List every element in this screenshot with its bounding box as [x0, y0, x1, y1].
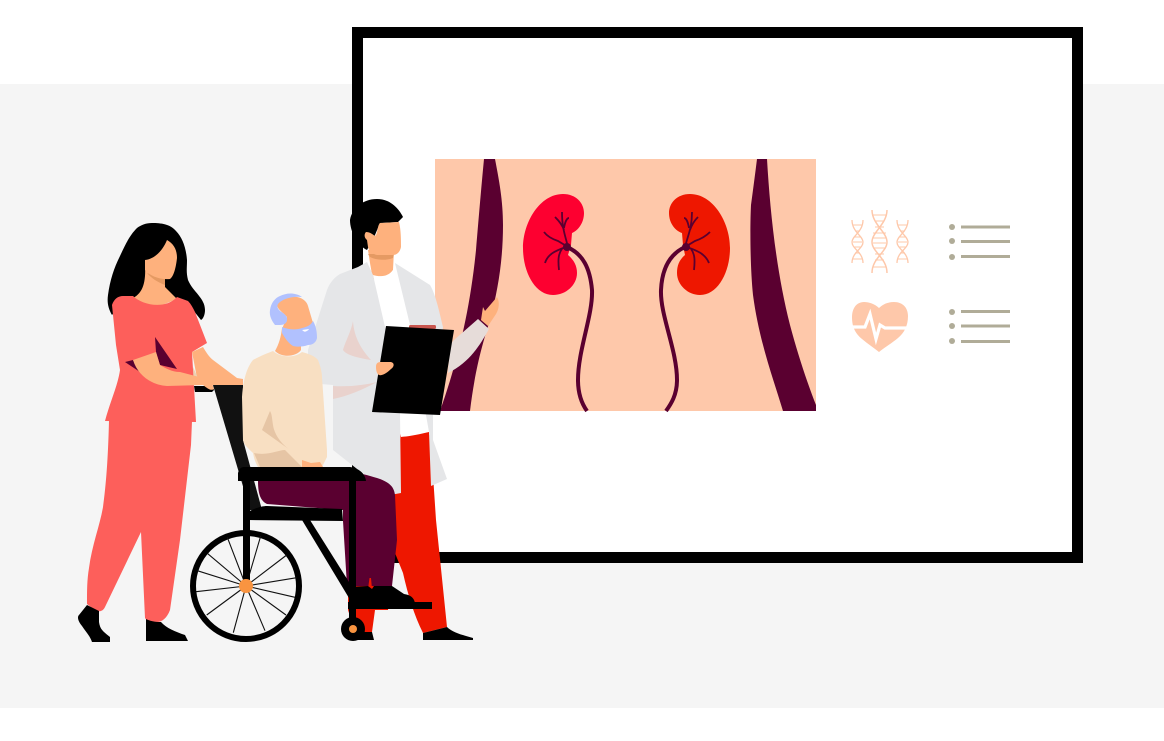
clipboard tab — [409, 325, 436, 329]
doctor hair — [350, 199, 403, 250]
footrest — [348, 602, 432, 609]
patient face — [277, 297, 313, 332]
sweater shadow — [254, 411, 302, 467]
wheelchair back — [213, 385, 262, 510]
patient mouth — [302, 329, 309, 332]
doctor hand on clipboard — [376, 362, 394, 375]
clipboard — [372, 326, 454, 415]
body contour left — [440, 159, 503, 411]
left kidney — [523, 194, 592, 411]
coat shadow upper — [343, 321, 371, 360]
tan wedge under arm — [193, 367, 204, 380]
patient sweater — [242, 351, 327, 467]
patient in wheelchair — [242, 294, 415, 603]
doctor red trousers — [348, 430, 447, 633]
nurse tunic — [105, 296, 207, 422]
doctor feet — [353, 627, 473, 640]
nurse hair — [108, 223, 205, 320]
nurse trousers — [87, 421, 192, 622]
right kidney — [661, 194, 730, 411]
seat — [248, 506, 343, 521]
rear wheel — [193, 533, 299, 639]
panel: kidney anatomy — [435, 159, 816, 411]
nurse left foot — [78, 605, 110, 642]
nurse face — [145, 240, 177, 279]
coat shadow lower — [333, 382, 377, 399]
spokes — [196, 536, 297, 633]
doctor lab coat — [308, 262, 447, 495]
doctor neck — [368, 250, 394, 280]
patient hand — [302, 460, 323, 467]
list lines top — [949, 224, 1010, 260]
list lines bottom — [949, 309, 1010, 344]
doctor face — [365, 222, 401, 255]
hub — [239, 579, 253, 593]
doctor right sleeve — [448, 319, 489, 373]
doctor red waist — [401, 432, 431, 455]
doctor white t-shirt — [373, 270, 430, 437]
front caster — [341, 617, 365, 641]
tunic fold shadows — [125, 337, 177, 372]
doctor — [308, 199, 499, 640]
right post — [349, 478, 356, 623]
icon: DNA helixes — [852, 210, 908, 273]
body contour right — [750, 159, 816, 411]
patient shoes — [350, 586, 415, 603]
red sliver — [368, 578, 372, 589]
nurse right foot — [146, 619, 188, 641]
wheelchair handle — [194, 386, 214, 392]
nurse — [78, 223, 243, 642]
doctor raised hand — [481, 297, 499, 326]
nurse right arm — [192, 347, 243, 385]
patient beard — [282, 321, 317, 347]
icon: heart with pulse — [852, 302, 908, 352]
left post — [243, 478, 250, 580]
nurse forearm — [133, 352, 214, 390]
nurse neck — [133, 265, 177, 308]
presentation screen frame — [358, 32, 1078, 558]
diagonal frame — [302, 520, 354, 598]
patient hair — [270, 294, 302, 325]
wheelchair — [193, 467, 432, 641]
patient neck — [275, 328, 301, 356]
armrest — [238, 467, 366, 481]
patient trousers — [258, 467, 397, 586]
